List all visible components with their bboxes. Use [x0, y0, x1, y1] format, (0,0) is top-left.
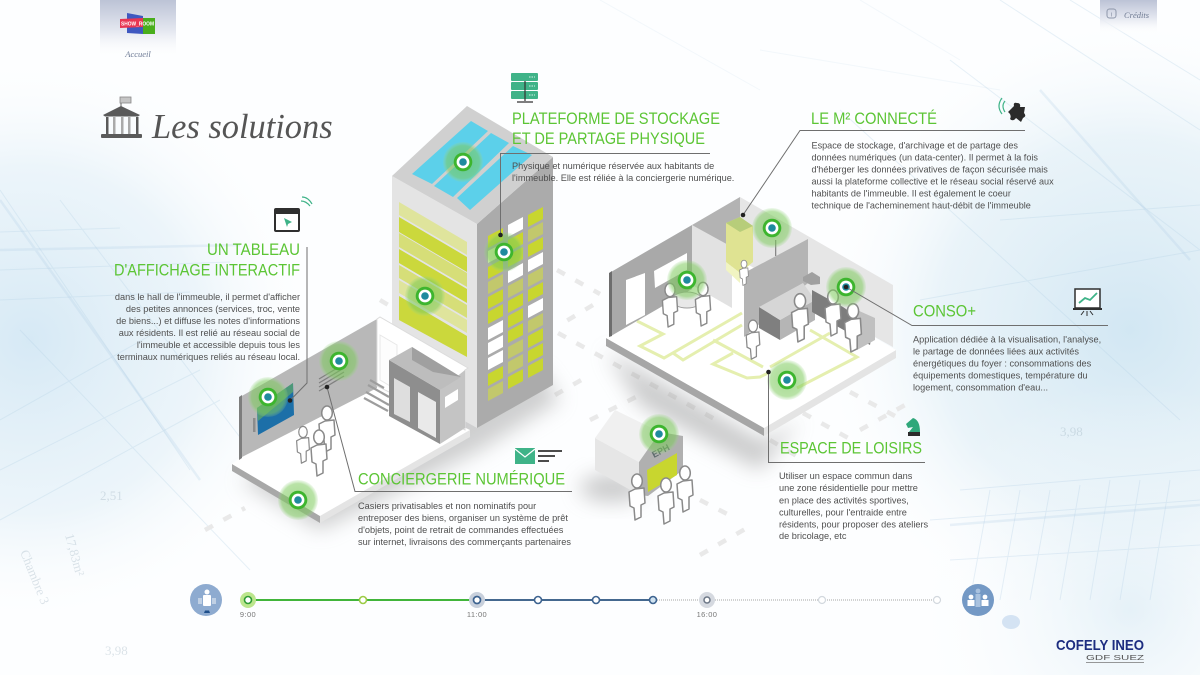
panel: espace de loisirs: résidents, pour proposer des ateliers: [779, 520, 929, 530]
panel: plateforme de stockage: Physique et numérique réservée aux habitants de: [512, 161, 714, 171]
background: 17,83m²: [62, 532, 88, 578]
icon: wifi puzzle: [999, 98, 1025, 122]
panel: conso+: équipements domestiques, température du: [913, 370, 1088, 380]
icon: chart board: [1073, 289, 1102, 316]
panel: tableau d'affichage: dans le hall de l'immeuble, il permet d'afficher: [115, 292, 300, 302]
meeting table: [672, 292, 702, 308]
illustration: EPH kiosk: [580, 410, 693, 524]
panel: tableau d'affichage: de biens...) et diffuse les notes d'informations: [116, 316, 300, 326]
nodes: [240, 592, 940, 608]
time labels: 9:00: [240, 610, 256, 619]
start icon: person: [190, 584, 222, 616]
logo: cofely ineo: [1056, 637, 1145, 662]
panel: le m2 connecté: Espace de stockage, d'archivage et de partage des: [812, 140, 1018, 150]
panel: le m2 connecté: aussi la plateforme collective et le réseau social réservé aux: [812, 176, 1054, 186]
lobby back wall: [240, 319, 377, 458]
panel: conso+: logement, consommation d'eau...: [913, 382, 1048, 392]
heading: UN TABLEAU: [207, 241, 300, 259]
panel: espace de loisirs: en place des activités sportives,: [779, 496, 909, 506]
icon: institution building: [101, 97, 142, 138]
counter: [812, 290, 875, 350]
panel: le m2 connecté: technique de l'acheminement haut-débit de l'immeuble: [812, 200, 1031, 210]
panel: conciergerie numérique: sur internet, livraisons des commerçants partenaires: [358, 537, 571, 547]
panel: conciergerie numérique: [325, 385, 572, 547]
kiosk residents: [629, 466, 693, 524]
panel: tableau d'affichage: terminaux numériques reliés au réseau local.: [117, 352, 300, 362]
heading: CONCIERGERIE NUMÉRIQUE: [358, 470, 565, 488]
nav tab: credits: i: [1111, 12, 1112, 18]
heading: CONSO+: [913, 302, 976, 320]
illustration: tower and lobby: [232, 106, 560, 530]
residents in lobby: [297, 406, 335, 476]
central partition: [744, 239, 808, 337]
title: Les solutions: [151, 108, 333, 146]
panel: tableau d'affichage: D'AFFICHAGE INTERACTIF: [114, 262, 300, 280]
logo: cofely ineo: COFELY INEO: [1056, 637, 1144, 654]
heading: PLATEFORME DE STOCKAGE: [512, 110, 720, 128]
background: 3,98: [105, 643, 128, 658]
leader line: [500, 154, 710, 235]
nav tab: credits: [1100, 0, 1157, 34]
icon: browser window: [274, 197, 312, 232]
leader line: [743, 130, 1025, 215]
panel: le m2 connecté: [741, 98, 1054, 217]
heading: LE M² CONNECTÉ: [811, 109, 937, 128]
nav tab: accueil: Accueil: [124, 49, 151, 59]
logo: cofely ineo: GDF SUEZ: [1086, 655, 1145, 662]
time labels: 11:00: [467, 610, 487, 619]
panel: tableau d'affichage: l'immeuble et accessible depuis tous les: [137, 340, 300, 350]
panel: conciergerie numérique: entreposer des biens, organiser un système de prêt: [358, 513, 568, 523]
icon: chess knight: [906, 418, 920, 436]
floor slab: [606, 338, 764, 436]
panel: le m2 connecté: données numériques (un data-center). Il permet à la fois: [812, 152, 1038, 162]
panel: tableau d'affichage: aux résidents. Il est relié au réseau social de: [119, 328, 300, 338]
leader line: [846, 287, 1108, 326]
back left wall: [611, 225, 692, 336]
title: [101, 97, 333, 146]
interactive screen: [253, 383, 294, 435]
timeline: [190, 584, 994, 619]
icon: server: [511, 73, 538, 102]
panel: espace de loisirs: de bricolage, etc: [779, 531, 847, 541]
background: Chambre 3: [17, 548, 53, 606]
street dashes: [205, 270, 905, 555]
heading: ESPACE DE LOISIRS: [780, 440, 922, 458]
residents in apartment: [662, 260, 861, 359]
panel: le m2 connecté: d'héberger les données privatives de façon sécurisée mais: [812, 164, 1048, 174]
stairs: [364, 380, 389, 411]
background: 2,51: [100, 488, 123, 503]
panel: espace de loisirs: [766, 370, 929, 541]
panel: conso+: [844, 285, 1108, 392]
panel: espace de loisirs: une zone résidentielle pour mettre: [779, 483, 918, 493]
panel: conso+: Application dédiée à la visualisation, l'analyse,: [913, 334, 1101, 344]
icon: envelope: [515, 448, 562, 464]
panel: le m2 connecté: habitants de l'immeuble. Il est également le coeur: [812, 188, 1011, 198]
data center column: [726, 217, 753, 283]
leader line: [768, 372, 925, 462]
hotspots: [248, 142, 866, 520]
floor shadow: [606, 350, 890, 470]
elevator block: [389, 347, 465, 444]
panel: conso+: le partage de données liées aux activités: [913, 346, 1079, 356]
back wall: [692, 197, 740, 285]
leader line: [327, 387, 572, 492]
tower: [392, 106, 553, 428]
concierge lockers: [319, 364, 344, 391]
illustration: apartment floor: [606, 197, 896, 470]
facade stripes: [399, 202, 467, 357]
panel: tableau d'affichage: des petites annonces (services, troc, vente: [126, 304, 300, 314]
panel: conciergerie numérique: Casiers privatisables et non nominatifs pour: [358, 501, 536, 511]
panel: plateforme de stockage: l'immeuble. Elle est réliée à la conciergerie numérique.: [512, 173, 734, 183]
background: 3,98: [1060, 424, 1083, 439]
leader line: [290, 247, 307, 400]
panel: plateforme de stockage: [498, 73, 734, 237]
time labels: 16:00: [697, 610, 717, 619]
panel: tableau d'affichage: [114, 197, 312, 403]
solar roof panels: [412, 121, 532, 210]
white back right wall: [740, 197, 893, 347]
panel: conso+: énergétiques du foyer : consommations des: [913, 358, 1092, 368]
reception desk: [759, 272, 820, 340]
panel: conciergerie numérique: d'objets, point de retrait de commandes effectuées: [358, 525, 564, 535]
ground shadow: [240, 370, 560, 530]
facade windows: [488, 207, 543, 401]
floor circuits: [637, 313, 857, 388]
end icon: people: [962, 584, 994, 616]
kiosk label: EPH: [650, 442, 671, 460]
partition: [692, 225, 732, 308]
panel: espace de loisirs: culturelles, pour l'entraide entre: [779, 508, 907, 518]
logo: show room: SHOW_ROOM: [121, 22, 154, 28]
time labels: [240, 610, 717, 619]
panel: plateforme de stockage: ET DE PARTAGE PHYSIQUE: [512, 130, 705, 148]
lobby floor: [232, 464, 320, 523]
nav tab: credits: Crédits: [1124, 10, 1150, 20]
nav tab: accueil: [100, 0, 176, 59]
lobby side wall: [377, 317, 468, 430]
panel: espace de loisirs: Utiliser un espace commun dans: [779, 471, 913, 481]
